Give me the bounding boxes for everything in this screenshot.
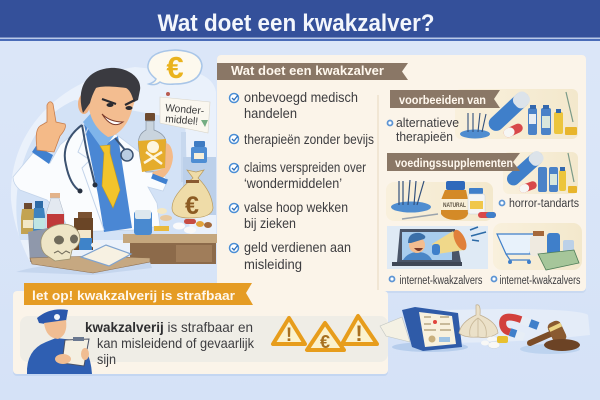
heading: voorbeeiden van: voorbeeiden van [399,95,486,107]
icon: pills [487,336,497,342]
image: shopping cart with money [493,223,582,270]
image: natural supplements [386,180,496,221]
label: alternatieve therapieen: alternatieve [396,115,459,130]
image: internet quack with megaphone [387,226,488,269]
title: Wat doet een kwakzalver? [158,10,434,37]
label: alternatieve therapieen [388,115,459,144]
icon: police officer [27,309,92,374]
icon: papers [380,317,410,342]
heading: voorbeeiden van [390,90,500,108]
example image: pills and acupuncture [455,89,578,139]
heading band: Wat doet een kwakzalver [231,63,384,78]
item 5 [230,239,351,272]
image: natural supplements: NATURAL [443,203,466,209]
background swoosh [11,67,216,262]
table with pills [123,208,217,264]
panel: warning [13,283,388,376]
poison bottle [138,113,173,180]
warning heading: let op! kwakzalverij is strafbaar [32,288,235,303]
speech bubble with euro [148,50,202,85]
icon: magnet [503,317,522,332]
icon: garlic [459,305,498,338]
label: horror-tandarts: horror-tandarts [509,198,579,210]
warning text: sijn [97,351,116,367]
labels: internet-kwakzalvers [390,275,581,287]
speech bubble with euro: € [166,50,184,85]
item 4: valse hoop wekken [244,199,348,215]
icon: book [402,307,462,351]
raised hand [32,146,53,164]
face [102,99,135,105]
warning text [85,319,255,367]
stethoscope [65,125,95,191]
bottle on shelf [191,141,207,163]
illustration: book, garlic, magnet and gavel [380,305,590,354]
item 3: ‘wondermiddelen’ [244,175,342,191]
item 1 [230,89,358,121]
hair [81,68,140,113]
checklist [230,89,374,272]
panel: what a quack does [217,55,586,293]
sign: wondermiddel [160,92,216,215]
icon: warning triangles: ! [286,325,292,346]
item 1: handelen [244,105,297,121]
labels: internet-kwakzalvers: internet-kwakzalvers [400,275,483,287]
icon: warning triangles: € [320,332,330,352]
icon: warning triangles: ! [355,321,363,346]
title banner [0,0,600,41]
item 2: therapieën zonder bevijs [244,131,374,147]
item 5: geld verdienen aan [244,239,351,255]
head [88,80,135,137]
label: alternatieve therapieen: therapieën [396,129,453,144]
doctor coat [13,125,168,232]
item 3 [230,159,366,191]
skull and book [16,224,152,275]
sign: wondermiddel: middel! [165,113,199,128]
item 5: misleiding [244,256,302,272]
heading: voedingssupplementen [387,153,520,171]
warning text: kan misleidend of gevaarlijk [97,335,255,351]
icon: warning triangles [273,316,377,352]
bottles left [21,193,93,250]
warning text: kwakzalverij is strafbaar en [85,319,253,335]
money bag: € [185,192,199,220]
item 1: onbevoegd medisch [244,89,358,105]
image: pills 2 [503,149,578,194]
shirt [84,124,132,232]
illustration: doctor with poison bottle [11,67,216,262]
icon: gavel [530,332,555,343]
item 3: claims verspreiden over [244,159,366,175]
warning heading [24,283,253,305]
tie [100,145,120,208]
money bag [172,170,213,220]
sign: wondermiddel: Wonder- [165,102,205,117]
item 4 [230,199,348,231]
heading: voedingssupplementen: voedingssupplementen [395,158,513,170]
item 4: bij zieken [244,215,296,231]
